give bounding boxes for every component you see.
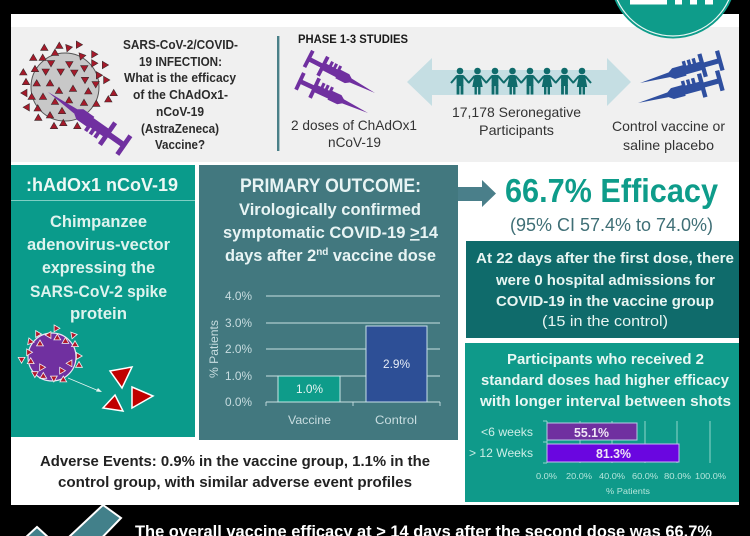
description text: adenovirus-vector: [27, 235, 170, 254]
outcome heading: days after 2: [225, 247, 317, 265]
bar chart: efficacy by interval: 55.1%: [574, 426, 609, 440]
bar chart: efficacy by interval: 0.0%: [536, 471, 557, 481]
bar chart: percent patients: 2.9%: [383, 357, 410, 371]
question text: SARS-CoV-2/COVID-: [123, 38, 238, 52]
panel: hospital admissions: At 22 days after the first dose, there: [476, 250, 734, 267]
bar chart: percent patients: Vaccine: [288, 413, 331, 427]
outcome heading: nd: [316, 247, 328, 258]
bar chart: percent patients: 4.0%: [225, 289, 252, 303]
panel: hospital admissions: COVID-19 in the vaccine group: [496, 293, 714, 310]
interval heading: with longer interval between shots: [479, 393, 731, 410]
bar chart: efficacy by interval: [469, 421, 726, 496]
interval heading: standard doses had higher efficacy: [481, 372, 730, 389]
question text: 19 INFECTION:: [139, 55, 222, 69]
control arm label: Control vaccine or: [612, 118, 725, 134]
bar chart: efficacy by interval: 81.3%: [596, 447, 631, 461]
icon: row of participants: [451, 68, 591, 94]
panel: dosing interval: [465, 343, 739, 502]
question text: of the ChAdOx1-: [133, 88, 228, 102]
interval heading: [479, 351, 731, 410]
question text: What is the efficacy: [124, 71, 236, 85]
vaccine arm label: nCoV-19: [328, 134, 381, 150]
icon: coronavirus with syringe: [20, 41, 133, 157]
bar chart: percent patients: 3.0%: [225, 316, 252, 330]
panel: hospital admissions: [466, 241, 739, 338]
outcome heading: Virologically confirmed: [239, 201, 421, 219]
outcome heading: symptomatic COVID-19 >14: [223, 224, 439, 242]
control arm label: saline placebo: [623, 137, 714, 153]
bar chart: efficacy by interval: % Patients: [606, 486, 650, 496]
bar chart: percent patients: 2.0%: [225, 342, 252, 356]
bar chart: efficacy by interval: 80.0%: [664, 471, 691, 481]
interval heading: Participants who received 2: [507, 351, 704, 368]
icon: bottom syringe: [25, 505, 121, 536]
bar chart: efficacy by interval: > 12 Weeks: [469, 446, 533, 460]
description text: expressing the: [42, 258, 155, 277]
description text: [27, 212, 170, 323]
question text: [123, 38, 238, 152]
outcome heading: [223, 176, 439, 265]
control arm label: [612, 118, 725, 153]
vaccine arm label: [291, 117, 417, 150]
bar chart: efficacy by interval: <6 weeks: [481, 425, 533, 439]
question text: nCoV-19: [156, 105, 204, 119]
participants label: [452, 104, 581, 138]
bar chart: percent patients: Control: [375, 413, 417, 427]
panel heading: :hAdOx1 nCoV-19: [26, 175, 178, 195]
description text: Chimpanzee: [50, 212, 147, 231]
panel: hospital admissions: (15 in the control): [542, 313, 668, 330]
description text: SARS-CoV-2 spike: [30, 282, 167, 301]
participants label: Participants: [479, 122, 554, 138]
icon: purple syringes: [294, 49, 380, 123]
bar chart: percent patients: [207, 289, 440, 427]
panel: study overview band: [11, 27, 739, 162]
bar chart: percent patients: 0.0%: [225, 395, 252, 409]
bar chart: efficacy by interval: 60.0%: [632, 471, 658, 481]
adverse events text: [40, 453, 430, 491]
icon: blue syringes: [635, 49, 725, 115]
description text: protein: [70, 304, 127, 323]
bar chart: efficacy by interval: 20.0%: [566, 471, 592, 481]
phase heading: PHASE 1-3 STUDIES: [298, 34, 408, 46]
adverse events text: Adverse Events: 0.9% in the vaccine group, 1.1% in the: [40, 453, 430, 470]
bar chart: efficacy by interval: 100.0%: [695, 471, 726, 481]
question text: (AstraZeneca): [141, 122, 219, 136]
bar chart: efficacy by interval: 40.0%: [599, 471, 625, 481]
panel: hospital admissions: were 0 hospital admissions for: [495, 272, 715, 289]
outcome heading: PRIMARY OUTCOME:: [240, 176, 421, 197]
double arrow: [407, 58, 631, 106]
vaccine arm label: 2 doses of ChAdOx1: [291, 117, 417, 133]
panel: primary outcome: [199, 165, 458, 440]
bar chart: percent patients: 1.0%: [296, 382, 323, 396]
outcome heading: vaccine dose: [328, 247, 436, 265]
question text: Vaccine?: [155, 138, 205, 152]
participants label: 17,178 Seronegative: [452, 104, 581, 120]
confidence interval: (95% CI 57.4% to 74.0%): [510, 215, 713, 235]
adverse events text: control group, with similar adverse event profiles: [58, 474, 412, 491]
arrow to efficacy result: [458, 180, 496, 207]
efficacy headline: 66.7% Efficacy: [505, 172, 719, 209]
bar chart: percent patients: 1.0%: [225, 369, 252, 383]
logo badge: [610, 0, 736, 38]
bar chart: percent patients: % Patients: [207, 320, 221, 378]
panel: ChAdOx1 description: [11, 165, 195, 437]
icon: adenovirus with spike proteins: [17, 325, 153, 411]
